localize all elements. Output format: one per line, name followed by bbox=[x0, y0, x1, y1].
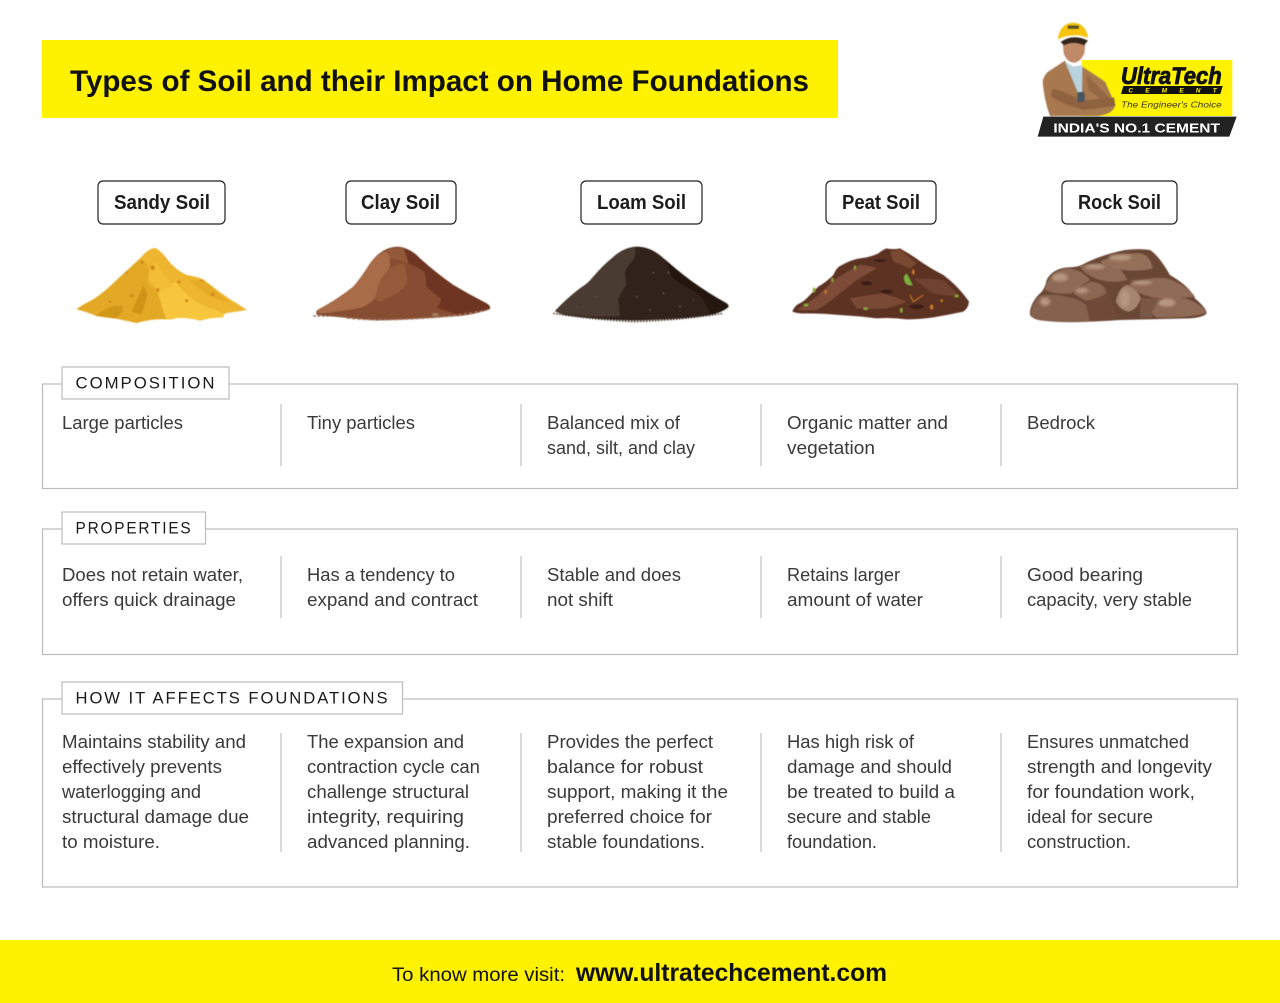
text: sandy foundation effect: structural damage due bbox=[62, 806, 249, 827]
text: loam composition: sand, silt, and clay bbox=[547, 437, 696, 458]
text: loam foundation effect: Provides the perfect bbox=[547, 731, 713, 752]
logo: UltraTech Cement bbox=[1038, 23, 1237, 137]
illustration: clay soil pile bbox=[313, 247, 490, 321]
text: peat foundation effect: damage and should bbox=[787, 756, 952, 777]
text: rock foundation effect: Ensures unmatched bbox=[1027, 731, 1189, 752]
heading: composition: COMPOSITION bbox=[76, 374, 216, 392]
text: sandy properties: Does not retain water, bbox=[62, 564, 243, 585]
heading: properties: PROPERTIES bbox=[76, 518, 192, 538]
text: clay foundation effect: advanced planning. bbox=[307, 831, 470, 852]
text: sandy foundation effect: Maintains stability and bbox=[62, 731, 246, 752]
soil label: Sandy Soil: Sandy Soil bbox=[114, 191, 210, 214]
text: sandy properties bbox=[62, 564, 243, 610]
text: rock foundation effect: for foundation work, bbox=[1027, 781, 1195, 802]
soil label: Loam Soil: Loam Soil bbox=[597, 191, 686, 214]
text: loam foundation effect: stable foundations. bbox=[547, 831, 705, 852]
soil label: Clay Soil bbox=[346, 181, 456, 224]
footer prompt: To know more visit: bbox=[392, 965, 565, 986]
text: rock foundation effect: construction. bbox=[1027, 831, 1131, 852]
text: sandy foundation effect bbox=[61, 731, 249, 852]
text: clay foundation effect bbox=[307, 731, 480, 852]
illustration: loam soil pile bbox=[553, 247, 729, 322]
text: rock foundation effect bbox=[1027, 731, 1213, 852]
soil label: Loam Soil bbox=[581, 181, 702, 224]
logo tagline: The Engineer's Choice bbox=[1121, 99, 1222, 109]
text: sandy foundation effect: to moisture. bbox=[62, 831, 160, 852]
text: clay foundation effect: challenge structural bbox=[307, 781, 469, 802]
text: clay foundation effect: contraction cycle can bbox=[307, 756, 480, 777]
text: loam properties: Stable and does bbox=[547, 564, 681, 585]
illustration: rock pile bbox=[1030, 249, 1207, 322]
illustration: peat soil pile bbox=[792, 248, 969, 319]
text: clay properties bbox=[307, 564, 478, 610]
text: loam foundation effect: balance for robust bbox=[547, 756, 703, 777]
text: loam composition bbox=[547, 412, 696, 458]
title banner bbox=[42, 40, 838, 118]
text: peat composition: Organic matter and bbox=[787, 412, 948, 433]
text: peat composition bbox=[787, 412, 948, 458]
text: loam composition: Balanced mix of bbox=[547, 412, 681, 433]
soil label: Peat Soil: Peat Soil bbox=[842, 191, 920, 214]
text: clay composition: Tiny particles bbox=[307, 412, 415, 433]
text: peat composition: vegetation bbox=[787, 437, 875, 458]
text: loam foundation effect: support, making it the bbox=[547, 781, 728, 802]
text: loam foundation effect: preferred choice for bbox=[547, 806, 712, 827]
text: peat properties bbox=[787, 564, 923, 610]
text: peat foundation effect: foundation. bbox=[787, 831, 877, 852]
text: clay foundation effect: The expansion and bbox=[307, 731, 464, 752]
text: loam foundation effect bbox=[547, 731, 728, 852]
soil label: Peat Soil bbox=[826, 181, 936, 224]
text: peat foundation effect: secure and stable bbox=[787, 806, 931, 827]
footer url: www.ultratechcement.com bbox=[575, 959, 887, 987]
panel: composition bbox=[42, 367, 1238, 488]
text: rock composition: Bedrock bbox=[1027, 412, 1096, 433]
text: peat foundation effect: Has high risk of bbox=[787, 731, 915, 752]
soil label: Sandy Soil bbox=[98, 181, 225, 224]
text: clay properties: Has a tendency to bbox=[307, 564, 455, 585]
footer banner bbox=[0, 940, 1280, 1003]
text: sandy composition: Large particles bbox=[62, 412, 183, 433]
text: rock properties bbox=[1027, 564, 1192, 610]
soil label: Rock Soil bbox=[1062, 181, 1177, 224]
text: clay properties: expand and contract bbox=[307, 589, 478, 610]
text: peat properties: Retains larger bbox=[787, 564, 900, 585]
title: Types of Soil and their Impact on Home Foundations bbox=[70, 65, 809, 98]
logo badge text: INDIA'S NO.1 CEMENT bbox=[1053, 122, 1220, 136]
soil label: Rock Soil: Rock Soil bbox=[1078, 191, 1161, 214]
text: sandy properties: offers quick drainage bbox=[62, 589, 236, 610]
illustration: sandy soil pile bbox=[77, 248, 247, 323]
soil label: Clay Soil: Clay Soil bbox=[361, 191, 440, 214]
text: peat properties: amount of water bbox=[787, 589, 923, 610]
heading: how it affects foundations bbox=[62, 682, 402, 714]
panel: how it affects foundations bbox=[42, 682, 1238, 887]
logo sub-wordmark: CEMENT bbox=[1128, 87, 1218, 94]
text: clay foundation effect: integrity, requiring bbox=[307, 806, 464, 827]
heading: how it affects foundations: HOW IT AFFECTS FOUNDATIONS bbox=[76, 688, 390, 708]
text: peat foundation effect bbox=[787, 731, 956, 852]
text: sandy foundation effect: effectively prevents bbox=[62, 756, 222, 777]
text: loam properties bbox=[547, 564, 681, 610]
text: sandy foundation effect: waterlogging and bbox=[61, 781, 201, 802]
text: peat foundation effect: be treated to build a bbox=[787, 781, 956, 802]
heading: composition bbox=[62, 367, 229, 399]
logo wordmark: UltraTech bbox=[1121, 63, 1222, 90]
text: rock properties: capacity, very stable bbox=[1027, 589, 1192, 610]
text: loam properties: not shift bbox=[547, 589, 613, 610]
text: rock foundation effect: strength and longevity bbox=[1027, 756, 1213, 777]
text: rock properties: Good bearing bbox=[1027, 564, 1143, 585]
heading: properties bbox=[62, 512, 206, 544]
panel: properties bbox=[42, 512, 1238, 654]
text: rock foundation effect: ideal for secure bbox=[1027, 806, 1153, 827]
